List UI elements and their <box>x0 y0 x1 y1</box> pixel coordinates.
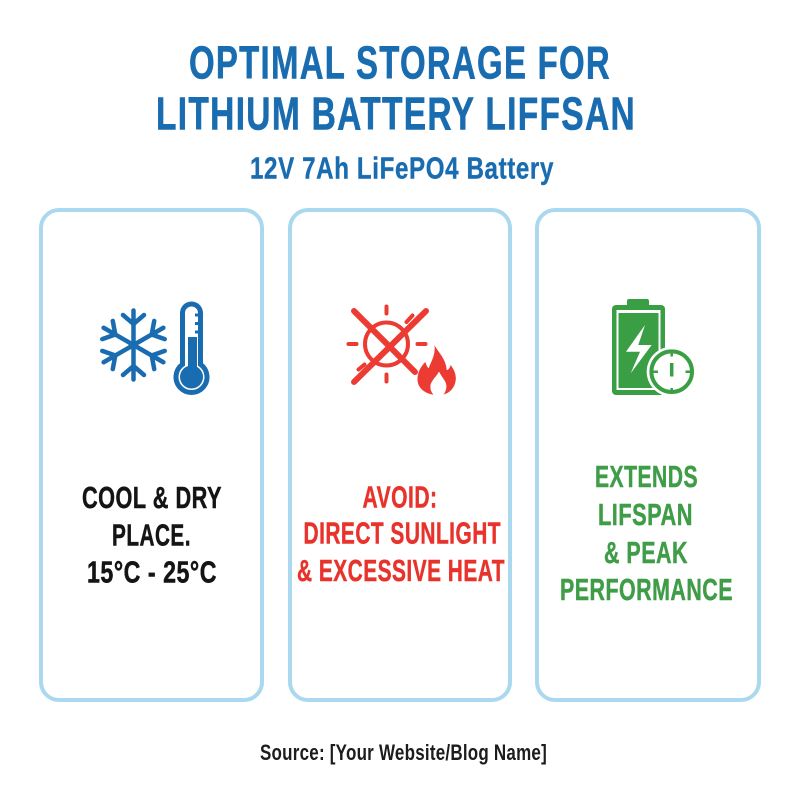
title: OPTIMAL STORAGE FOR <box>189 36 611 88</box>
text: extends lifespan: & PEAK <box>604 535 688 570</box>
title <box>156 36 636 140</box>
panel: extends lifespan <box>537 210 759 700</box>
panel border <box>537 210 759 700</box>
icon: crossed-out sun <box>348 306 426 382</box>
panel: avoid heat <box>290 210 510 700</box>
icon: snowflake <box>98 310 169 380</box>
text: avoid <box>297 480 505 588</box>
icon: battery with clock <box>612 299 697 397</box>
text: cool and dry: 15°C - 25°C <box>87 554 217 590</box>
subtitle: 12V 7Ah LiFePO4 Battery <box>250 150 554 186</box>
text: cool and dry: PLACE. <box>112 518 191 552</box>
panel border <box>41 210 262 700</box>
text: avoid: & EXCESSIVE HEAT <box>297 553 505 588</box>
text: extends lifespan <box>560 459 733 607</box>
title: LITHIUM BATTERY LIFFSAN <box>156 88 636 140</box>
text: avoid: AVOID: <box>362 480 438 514</box>
panel: cool and dry <box>41 210 262 700</box>
text: cool and dry <box>82 480 222 590</box>
text: extends lifespan: LIFSPAN <box>598 497 693 532</box>
text: avoid: DIRECT SUNLIGHT <box>304 516 501 550</box>
text: cool and dry: COOL & DRY <box>82 480 222 515</box>
text: extends lifespan: EXTENDS <box>595 459 698 494</box>
icon: thermometer <box>176 304 207 393</box>
source: Source: [Your Website/Blog Name] <box>260 740 547 765</box>
panel border <box>290 210 510 700</box>
icon: flame <box>417 344 456 395</box>
